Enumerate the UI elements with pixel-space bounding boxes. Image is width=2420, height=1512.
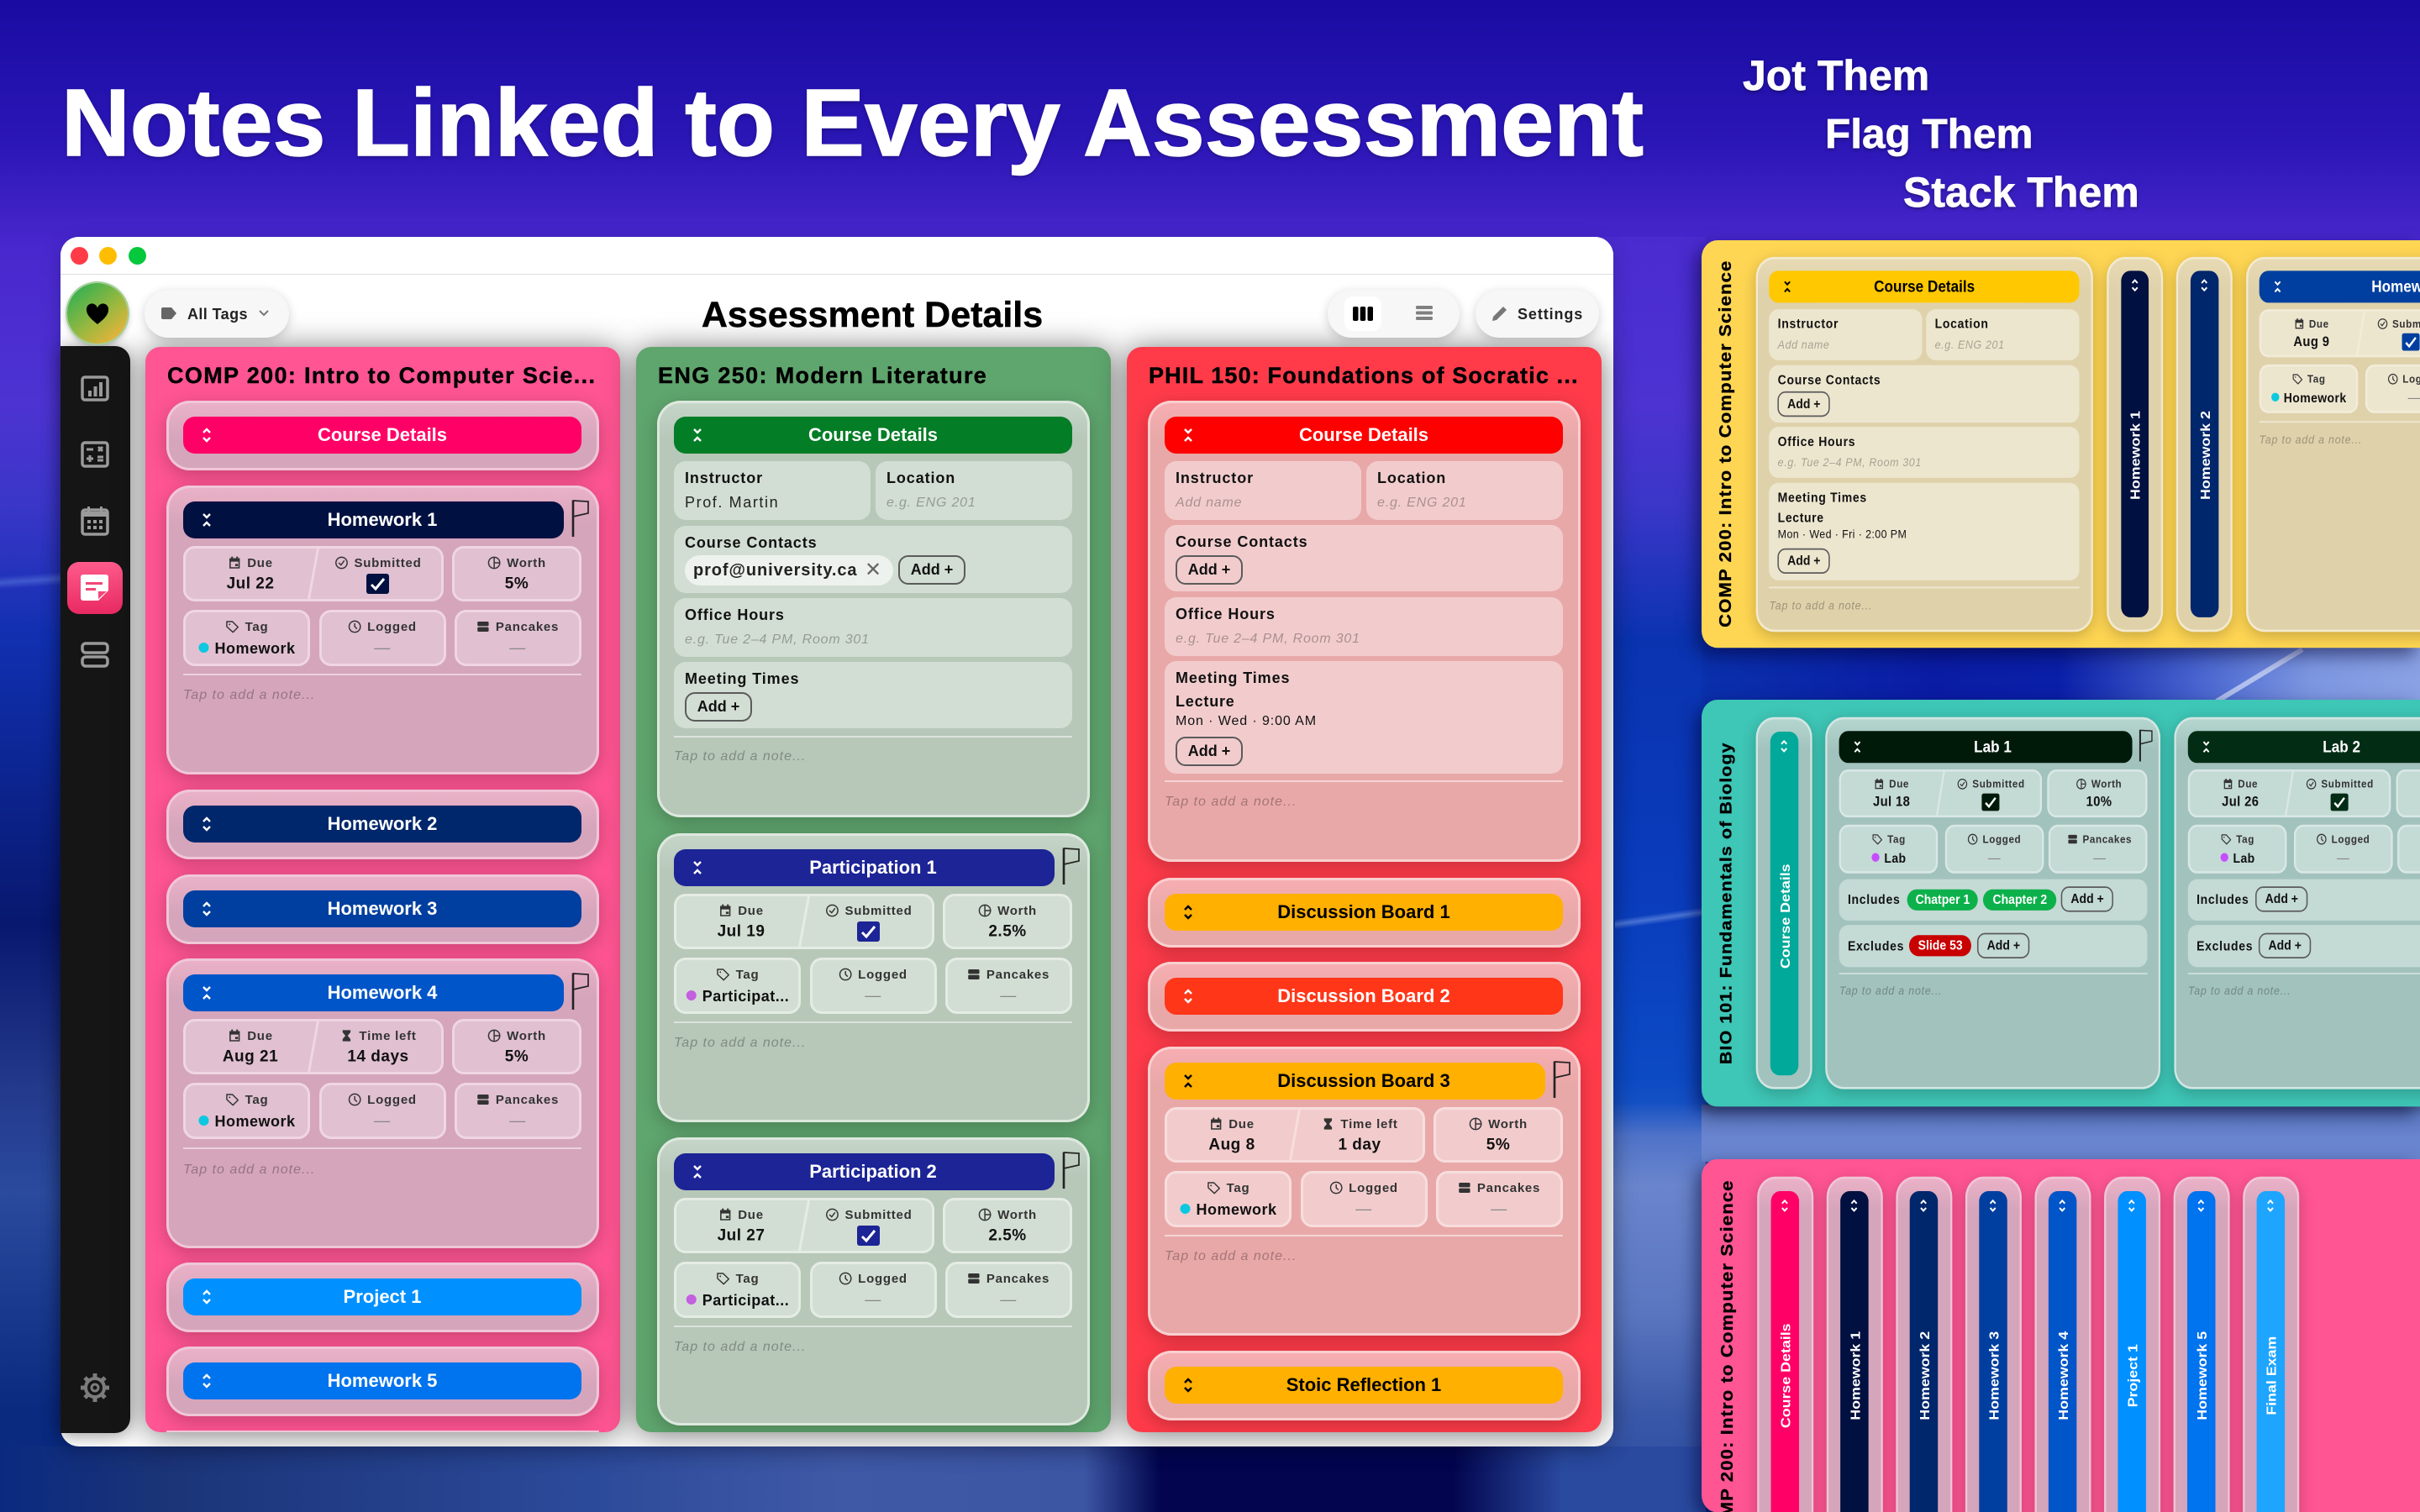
stats: Submitted	[354, 556, 422, 570]
stats: Tag	[1227, 1181, 1249, 1195]
header bar: Lab 1	[1974, 738, 2012, 756]
header bar	[1165, 1367, 1563, 1404]
card: Discussion Board 3	[1148, 1047, 1581, 1336]
strip: Homework 1	[1827, 1177, 1883, 1512]
stats: Worth	[507, 1029, 546, 1043]
tagline: Stack Them: Stack Them	[1903, 169, 2139, 216]
field: Includes: Add +	[2070, 892, 2104, 906]
field: Excludes: Slide 53	[1918, 938, 1963, 953]
header bar: Discussion Board 2	[1277, 985, 1450, 1006]
app logo: heart	[67, 283, 128, 344]
header bar: Participation 2	[809, 1161, 937, 1182]
stats: Due	[1228, 1117, 1255, 1131]
field: Course Contacts: Add +	[1188, 561, 1230, 578]
icon: stats	[81, 375, 109, 402]
stats: Jul 26	[2222, 795, 2259, 810]
field: Location: Location	[1377, 470, 1446, 486]
header bar: Project 1	[344, 1286, 421, 1307]
header bar	[183, 1278, 581, 1315]
collapsed bar	[1910, 1191, 1938, 1512]
icon: flag	[2139, 729, 2153, 761]
note placeholder: Tap to add a note...	[1839, 985, 1942, 998]
field: Course Contacts	[1165, 525, 1563, 591]
stats: 2.5%	[988, 922, 1027, 941]
icon: calendar	[81, 507, 109, 536]
field: Instructor: Instructor	[1778, 317, 1839, 331]
field: Meeting Times: Meeting Times	[1176, 669, 1290, 686]
stats: Logged	[2332, 833, 2370, 846]
card: Course Details	[657, 401, 1090, 817]
note placeholder: Tap to add a note...	[1165, 795, 1297, 809]
card: Homework 1	[166, 486, 599, 774]
settings pill	[1476, 290, 1599, 338]
card: Lab 2	[2175, 717, 2420, 1089]
collapsed bar: Project 1	[2126, 1344, 2141, 1407]
header bar: Course Details	[1874, 277, 1975, 296]
collapsed bar	[2191, 271, 2218, 617]
stats: Due	[2238, 779, 2258, 790]
stats: Homework	[214, 1113, 296, 1130]
stats: 5%	[505, 1048, 529, 1065]
stats: Due	[738, 904, 764, 918]
field: Course Contacts	[674, 526, 1072, 593]
stats: Jul 19	[718, 922, 765, 941]
stats: Tag	[245, 620, 268, 634]
header bar: Homework 1	[328, 509, 437, 530]
field: Instructor: Prof. Martin	[685, 494, 779, 511]
field: Meeting Times	[1165, 661, 1563, 774]
collapsed bar	[1980, 1191, 2007, 1512]
collapsed bar: Homework 1	[2128, 411, 2144, 500]
card: Participation 2	[657, 1137, 1090, 1425]
field: Location	[1366, 461, 1563, 520]
header bar: Homework 3	[328, 898, 437, 919]
collapsed bar: Homework 3	[1987, 1331, 2002, 1420]
note placeholder: Tap to add a note...	[1165, 1249, 1297, 1263]
field: Office Hours: Office Hours	[1176, 606, 1276, 622]
stats: 14 days	[347, 1048, 409, 1065]
icon: columns	[1353, 307, 1373, 321]
field: Location: Location	[886, 470, 955, 486]
field: Instructor: Add name	[1176, 496, 1242, 510]
header bar	[1165, 1063, 1545, 1100]
field: Meeting Times: Mon · Wed · 9:00 AM	[1176, 714, 1317, 728]
stats: Logged	[858, 968, 908, 982]
header bar	[183, 1362, 581, 1399]
card: Course Details	[1148, 401, 1581, 862]
stats: Worth	[997, 904, 1037, 918]
course column: COMP 200	[145, 347, 620, 1432]
header bar: Discussion Board 3	[1277, 1070, 1450, 1091]
collapsed bar: Homework 4	[2056, 1331, 2071, 1420]
collapsed bar	[1770, 732, 1798, 1075]
field: Meeting Times: Add +	[697, 698, 739, 715]
collapsed bar	[2257, 1191, 2285, 1512]
field: Office Hours: Office Hours	[1778, 434, 1855, 449]
stats: Jul 22	[227, 575, 274, 593]
field: Location: e.g. ENG 201	[886, 496, 976, 510]
stats: —	[2093, 851, 2106, 866]
strip: Homework 2	[2176, 257, 2233, 632]
header bar: Course Details	[808, 424, 938, 445]
stats: Tag	[245, 1093, 268, 1107]
label: All Tags	[187, 306, 248, 323]
header bar	[1165, 894, 1563, 931]
stats: Jul 27	[718, 1226, 765, 1245]
stats: Logged	[367, 620, 417, 634]
filter pill: All Tags	[145, 290, 289, 338]
field: Instructor: Add name	[1778, 339, 1829, 351]
field: Includes: Includes	[1848, 892, 1900, 907]
stats: 1 day	[1338, 1136, 1381, 1154]
stats: Pancakes	[986, 968, 1050, 982]
field: Course Contacts: prof@university.ca	[693, 561, 857, 580]
stats: Participat...	[702, 988, 789, 1005]
stats: Pancakes	[986, 1272, 1050, 1286]
stats: Tag	[2307, 373, 2326, 386]
field: Office Hours: e.g. Tue 2–4 PM, Room 301	[1778, 457, 1922, 469]
note placeholder: Tap to add a note...	[183, 1163, 315, 1177]
field: Meeting Times: Lecture	[1176, 693, 1235, 710]
stats: —	[1355, 1201, 1372, 1218]
field: Meeting Times	[674, 662, 1072, 728]
stats: Logged	[858, 1272, 908, 1286]
stats: 5%	[505, 575, 529, 593]
field: Excludes: Excludes	[1848, 938, 1904, 953]
header bar: Discussion Board 1	[1277, 901, 1450, 922]
field: Instructor: Instructor	[685, 470, 763, 486]
stats: 10%	[2086, 795, 2112, 810]
stats	[1839, 769, 2148, 874]
field: Course Contacts	[1770, 365, 2080, 423]
icon: tag	[161, 307, 176, 319]
header bar: Participation 1	[809, 857, 937, 878]
collapsed bar: Course Details	[1779, 1323, 1794, 1428]
stats: Tag	[2236, 833, 2254, 846]
header bar	[183, 501, 564, 538]
field: Office Hours: e.g. Tue 2–4 PM, Room 301	[685, 633, 870, 647]
stats: Pancakes	[1477, 1181, 1540, 1195]
card: Stoic Reflection 1	[1148, 1351, 1581, 1420]
stats: Homework	[1196, 1201, 1277, 1218]
note placeholder: Tap to add a note...	[2188, 985, 2291, 998]
icon: notes (active)	[67, 562, 123, 614]
icon: flag	[571, 973, 589, 1010]
icon: calculator	[81, 441, 109, 468]
stats: Tag	[736, 1272, 759, 1286]
icon: rows view	[1416, 306, 1433, 320]
stats	[1165, 1107, 1563, 1227]
field: Course Contacts: Course Contacts	[1176, 533, 1308, 550]
collapsed bar: Course Details	[1778, 864, 1793, 969]
field: Location	[876, 461, 1072, 520]
header bar: Homework 5	[328, 1370, 437, 1391]
strip: Homework 5	[2173, 1177, 2229, 1512]
field: Meeting Times	[1770, 483, 2080, 580]
icon: pencil	[1492, 307, 1507, 321]
field: Excludes	[2188, 925, 2420, 967]
field: Office Hours: e.g. Tue 2–4 PM, Room 301	[1176, 632, 1360, 646]
header bar: Course Details	[318, 424, 447, 445]
card: Participation 1	[657, 833, 1090, 1122]
icon: flag	[571, 500, 589, 537]
stats: Worth	[1488, 1117, 1528, 1131]
field: Course Contacts: Add +	[1787, 396, 1820, 411]
traffic lights	[71, 247, 146, 265]
icon: flag	[1062, 848, 1080, 885]
stats: —	[1000, 1292, 1017, 1309]
stats: Time left	[359, 1029, 417, 1043]
stats: Worth	[997, 1208, 1037, 1222]
field: Location	[1927, 309, 2080, 360]
field: Instructor	[1165, 461, 1361, 520]
field: Instructor	[1770, 309, 1923, 360]
column heading: ENG 250: Modern Literature	[658, 363, 987, 388]
stats: Due	[247, 556, 273, 570]
stats: Worth	[507, 556, 546, 570]
collapsed bar	[1771, 1191, 1799, 1512]
field: Office Hours: Office Hours	[685, 606, 785, 623]
stats: Submitted	[2321, 779, 2374, 790]
field: Meeting Times: Add +	[1188, 743, 1230, 759]
stats: Logged	[367, 1093, 417, 1107]
header bar: Lab 2	[2323, 738, 2360, 756]
card: Project 1	[166, 1263, 599, 1332]
card: Discussion Board 2	[1148, 962, 1581, 1032]
header bar	[2188, 731, 2420, 764]
yellow panel: COMP 200 stacked	[1684, 235, 2420, 667]
stats: Aug 21	[223, 1048, 278, 1065]
header bar: Homework 4	[328, 982, 437, 1003]
field: Location: e.g. ENG 201	[1935, 339, 2005, 351]
column heading: COMP 200: Intro to Computer Scie...	[167, 363, 596, 388]
header bar: Homework 2	[328, 813, 437, 834]
stats: 2.5%	[988, 1226, 1027, 1245]
field: Meeting Times: Lecture	[1778, 511, 1824, 525]
column heading: PHIL 150: Foundations of Socratic ...	[1149, 363, 1579, 388]
note placeholder: Tap to add a note...	[674, 1340, 806, 1354]
rotated course title: BIO 101: Fundamentals of Biology	[1718, 742, 1735, 1064]
stats	[674, 894, 1072, 1014]
collapsed bar	[2121, 271, 2149, 617]
collapsed bar: Homework 2	[2198, 411, 2213, 500]
icon: flag	[1062, 1152, 1080, 1189]
field: Meeting Times: Mon · Wed · Fri · 2:00 PM	[1778, 528, 1907, 541]
card: Course Details	[166, 401, 599, 470]
strip: Homework 4	[2034, 1177, 2091, 1512]
screen heading: Assessment Details	[702, 295, 1043, 335]
stats: —	[509, 1112, 526, 1131]
stats: Jul 18	[1873, 795, 1910, 810]
collapsed bar	[2187, 1191, 2216, 1512]
strip: Homework 2	[1896, 1177, 1952, 1512]
stats	[2259, 309, 2420, 413]
field: Instructor	[674, 461, 871, 520]
note placeholder: Tap to add a note...	[1770, 600, 1872, 612]
header bar: Course Details	[1299, 424, 1428, 445]
strip: Course Details	[1757, 1177, 1813, 1512]
app window	[60, 237, 1613, 1446]
window title bar	[60, 237, 1613, 275]
strip: Homework 3	[1965, 1177, 2022, 1512]
note placeholder: Tap to add a note...	[674, 749, 806, 764]
field: Course Contacts: ✕	[865, 559, 882, 581]
stats: —	[1491, 1201, 1507, 1218]
card: Homework 3	[2246, 257, 2420, 632]
field: Includes: Chapter 2	[1992, 892, 2047, 907]
stats: Tag	[1887, 833, 1906, 846]
field: Includes: Chatper 1	[1916, 892, 1970, 907]
field: Excludes: Add +	[2269, 938, 2302, 953]
stats: Pancakes	[2083, 833, 2132, 846]
header bar	[183, 974, 564, 1011]
collapsed bar	[2049, 1191, 2076, 1512]
field: Excludes: Excludes	[2196, 938, 2253, 953]
stats: Due	[247, 1029, 273, 1043]
stats: Submitted	[844, 904, 913, 918]
stats: Participat...	[702, 1292, 789, 1309]
field: Includes	[1839, 879, 2148, 921]
field: Includes: Includes	[2196, 892, 2249, 907]
field: Office Hours	[1770, 427, 2080, 478]
stats: —	[2337, 851, 2349, 866]
stats: —	[374, 640, 391, 657]
field: Location: Location	[1935, 317, 1989, 331]
card: Course Details	[1756, 257, 2093, 632]
collapsed bar	[1841, 1191, 1869, 1512]
course column: ENG 250	[636, 347, 1111, 1432]
field: Meeting Times: Add +	[1787, 554, 1820, 568]
collapsed bar: Final Exam	[2265, 1336, 2280, 1415]
field: Course Contacts: Add +	[911, 561, 953, 578]
field: Includes: Add +	[2265, 892, 2298, 906]
stats: —	[1988, 851, 2001, 866]
header bar	[183, 890, 581, 927]
strip: Project 1	[2104, 1177, 2160, 1512]
stats: Homework	[2284, 391, 2347, 405]
card: next (clipped)	[166, 1431, 599, 1432]
stats: Aug 9	[2293, 334, 2329, 349]
collapsed bar: Homework 5	[2195, 1331, 2210, 1420]
card: Homework 3	[166, 874, 599, 944]
collapsed bar: Homework 1	[1848, 1331, 1863, 1420]
field: Location: e.g. ENG 201	[1377, 496, 1467, 510]
note placeholder: Tap to add a note...	[2260, 434, 2362, 446]
icon: chevron	[259, 310, 269, 316]
stats: —	[374, 1112, 391, 1131]
card: Homework 4	[166, 958, 599, 1248]
stats: Worth	[2091, 779, 2122, 790]
card: Homework 5	[166, 1347, 599, 1416]
strip: Course Details	[1756, 717, 1812, 1089]
field: Includes	[2188, 879, 2420, 921]
stats	[674, 1198, 1072, 1318]
tagline: Jot Them: Jot Them	[1743, 52, 1929, 99]
field: Meeting Times: Meeting Times	[1778, 490, 1867, 505]
stats: —	[865, 988, 881, 1005]
field: Excludes: Add +	[1987, 938, 2020, 953]
strip: Final Exam	[2243, 1177, 2299, 1512]
header bar	[2260, 270, 2420, 302]
icon: stack	[81, 642, 109, 668]
header bar	[1770, 270, 2080, 302]
stats	[183, 1019, 581, 1139]
stats: 5%	[1486, 1136, 1510, 1154]
stats: —	[865, 1292, 881, 1309]
header bar: Stoic Reflection 1	[1286, 1374, 1441, 1395]
field: Course Contacts: Course Contacts	[685, 534, 818, 551]
stats: Pancakes	[496, 620, 559, 634]
stats: —	[509, 640, 526, 657]
card: Discussion Board 1	[1148, 878, 1581, 948]
title: Notes Linked to Every Assessment	[61, 70, 1644, 176]
label: Settings	[1518, 306, 1583, 323]
stats: Pancakes	[496, 1093, 559, 1107]
header bar	[674, 1153, 1055, 1190]
header bar	[1165, 978, 1563, 1015]
stats: Logged	[1349, 1181, 1398, 1195]
header bar	[674, 849, 1055, 886]
teal panel: BIO 101 stacked	[1684, 695, 2420, 1126]
collapsed bar	[2118, 1191, 2146, 1512]
icon: settings gear	[81, 1373, 109, 1402]
stats: Submitted	[844, 1208, 913, 1222]
header bar	[183, 417, 581, 454]
stats: Logged	[1983, 833, 2021, 846]
stats: Tag	[736, 968, 759, 982]
card: Lab 1	[1825, 717, 2160, 1089]
field: Instructor: Instructor	[1176, 470, 1254, 486]
field: Office Hours	[1165, 597, 1563, 656]
stats: Submitted	[1972, 779, 2025, 790]
icon: heart	[86, 303, 109, 324]
field: Meeting Times: Meeting Times	[685, 670, 799, 687]
note placeholder: Tap to add a note...	[183, 688, 315, 702]
stats: Lab	[1884, 851, 1906, 865]
tagline: Flag Them: Flag Them	[1825, 111, 2033, 157]
pink panel: COMP 200 all collapsed	[1684, 1154, 2420, 1512]
header bar	[1839, 731, 2133, 764]
field: Office Hours	[674, 598, 1072, 657]
field: Excludes	[1839, 925, 2148, 967]
stats: Time left	[1340, 1117, 1398, 1131]
stats: Due	[738, 1208, 764, 1222]
sidebar	[60, 346, 130, 1433]
selected: columns view	[1344, 297, 1381, 331]
stats: Due	[2309, 318, 2329, 330]
stats: Homework	[214, 640, 296, 657]
stats	[2188, 769, 2420, 874]
icon: flag	[1553, 1061, 1570, 1098]
card: Homework 2	[166, 790, 599, 859]
stats: Due	[1889, 779, 1909, 790]
note placeholder: Tap to add a note...	[674, 1036, 806, 1050]
stats: Lab	[2233, 851, 2255, 865]
rotated course title: COMP 200: Intro to Computer Science	[1717, 260, 1735, 627]
header bar	[1165, 417, 1563, 454]
course column: PHIL 150	[1127, 347, 1602, 1432]
header bar	[674, 417, 1072, 454]
stats	[183, 546, 581, 666]
view toggle	[1328, 290, 1460, 338]
stats: Aug 8	[1208, 1136, 1255, 1154]
field: Course Contacts: Course Contacts	[1778, 372, 1881, 387]
stats: —	[1000, 988, 1017, 1005]
collapsed bar: Homework 2	[1918, 1331, 1933, 1420]
strip: Homework 1	[2107, 257, 2163, 632]
header bar	[183, 806, 581, 843]
